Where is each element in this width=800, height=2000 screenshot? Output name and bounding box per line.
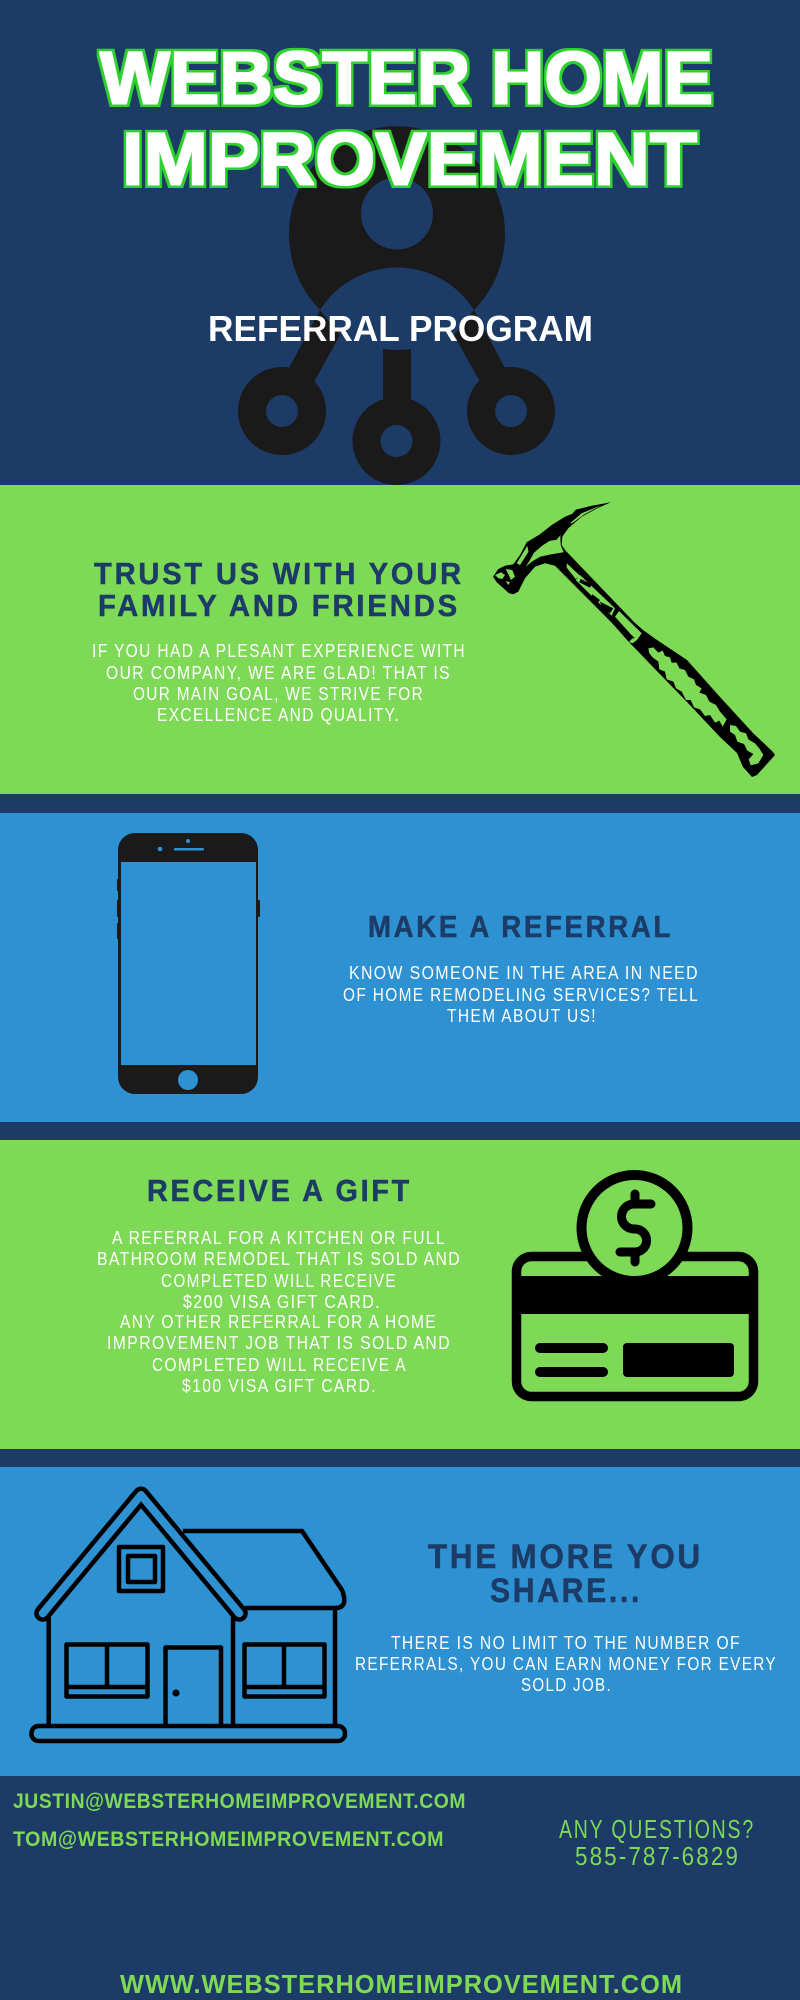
text block: the more you share <box>355 1633 777 1695</box>
text block: make a referral: OF HOME REMODELING SERVICES? TELL <box>343 985 699 1005</box>
phone contact <box>559 1814 755 1871</box>
text block: receive a gift: ANY OTHER REFERRAL FOR A HOME <box>120 1312 437 1332</box>
icon: house <box>32 1495 345 1741</box>
icon: hammer <box>493 502 775 777</box>
text block: receive a gift: $200 VISA GIFT CARD. <box>183 1292 381 1312</box>
heading: trust us: TRUST US WITH YOUR <box>94 556 464 591</box>
text block: the more you share: SOLD JOB. <box>521 1675 612 1695</box>
heading: the more you share <box>428 1538 703 1610</box>
subtitle: REFERRAL PROGRAM <box>208 308 593 349</box>
email addresses: JUSTIN@WEBSTERHOMEIMPROVEMENT.COM <box>13 1790 466 1813</box>
panel: receive a gift <box>0 1140 800 1449</box>
text block: trust us: EXCELLENCE AND QUALITY. <box>157 705 400 725</box>
text block: make a referral <box>343 963 699 1026</box>
panel: header <box>0 0 800 485</box>
text block: receive a gift: BATHROOM REMODEL THAT IS SOLD AND <box>97 1249 461 1269</box>
heading: the more you share: SHARE... <box>490 1572 642 1610</box>
heading: receive a gift: RECEIVE A GIFT <box>147 1173 412 1208</box>
title: IMPROVEMENT <box>122 118 697 200</box>
panel: footer contact <box>0 1776 800 2000</box>
text block: receive a gift: IMPROVEMENT JOB THAT IS SOLD AND <box>107 1333 451 1353</box>
title <box>100 36 713 200</box>
text block: the more you share: THERE IS NO LIMIT TO THE NUMBER OF <box>391 1633 741 1653</box>
icon: referral network person <box>238 126 555 485</box>
panel: trust us <box>0 485 800 794</box>
text block: trust us <box>92 641 466 725</box>
text block: trust us: OUR COMPANY, WE ARE GLAD! THAT IS <box>106 663 451 683</box>
text block: receive a gift: A REFERRAL FOR A KITCHEN OR FULL <box>112 1228 446 1248</box>
heading: trust us: FAMILY AND FRIENDS <box>98 588 460 623</box>
text block: trust us: OUR MAIN GOAL, WE STRIVE FOR <box>133 684 424 704</box>
heading: trust us <box>94 556 464 623</box>
phone contact: 585-787-6829 <box>575 1841 740 1871</box>
icon: credit card and dollar coin <box>512 1170 758 1396</box>
email addresses: TOM@WEBSTERHOMEIMPROVEMENT.COM <box>13 1828 444 1851</box>
heading: the more you share: THE MORE YOU <box>428 1538 703 1576</box>
email addresses <box>13 1790 466 1851</box>
icon: smartphone <box>117 833 260 1094</box>
text block: make a referral: KNOW SOMEONE IN THE AREA IN NEED <box>349 963 699 983</box>
text block: receive a gift <box>97 1228 461 1396</box>
website: WWW.WEBSTERHOMEIMPROVEMENT.COM <box>120 1969 683 1999</box>
panel: the more you share <box>0 1467 800 1776</box>
text block: receive a gift: COMPLETED WILL RECEIVE A <box>152 1355 407 1375</box>
text block: make a referral: THEM ABOUT US! <box>447 1006 597 1026</box>
panel: make a referral <box>0 813 800 1122</box>
title: WEBSTER HOME <box>100 36 713 120</box>
text block: receive a gift: $100 VISA GIFT CARD. <box>182 1376 377 1396</box>
text block: trust us: IF YOU HAD A PLESANT EXPERIENCE WITH <box>92 641 466 661</box>
heading: make a referral: MAKE A REFERRAL <box>368 909 673 944</box>
text block: receive a gift: COMPLETED WILL RECEIVE <box>161 1271 397 1291</box>
